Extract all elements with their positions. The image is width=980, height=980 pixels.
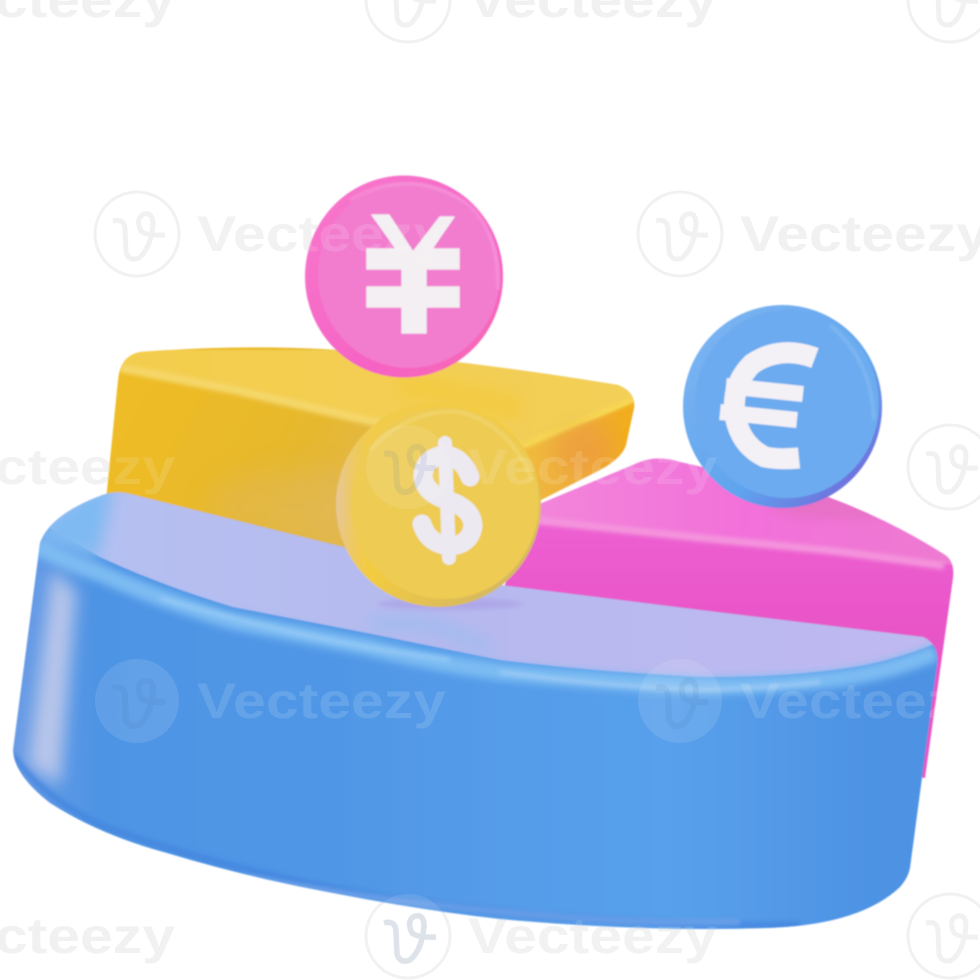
watermark: translucent overlay marks: Vecteezy <box>740 673 980 729</box>
icon: euro symbol <box>720 353 815 459</box>
pie slice: blue <box>13 480 950 929</box>
rim highlight on blue slice <box>36 545 936 686</box>
icon: yen symbol <box>367 215 459 333</box>
watermark: translucent overlay marks <box>0 206 980 978</box>
watermark: base marks on white background: Vecteezy <box>197 206 446 262</box>
coin: euro <box>683 305 882 508</box>
left highlight band <box>28 570 76 785</box>
coin: dollar <box>336 402 541 607</box>
bottom edge shading <box>13 755 800 925</box>
watermark: translucent overlay marks: Vecteezy <box>468 439 717 495</box>
pie slice: yellow <box>106 346 636 548</box>
top surface of blue slice <box>30 480 950 677</box>
pie chart and coins artwork <box>13 176 960 929</box>
watermark: translucent overlay marks: Vecteezy <box>197 673 446 729</box>
watermark: base marks on white background: Vecteezy <box>468 908 717 964</box>
icon: dollar symbol <box>422 443 473 558</box>
shadow of dollar coin <box>378 598 522 610</box>
watermark: base marks on white background: Vecteezy <box>740 206 980 262</box>
coin: yen <box>305 176 503 378</box>
watermark: translucent overlay marks: Vecteezy <box>468 908 717 964</box>
watermark: translucent overlay marks: Vecteezy <box>197 206 446 262</box>
pie slice: pink <box>500 450 960 778</box>
